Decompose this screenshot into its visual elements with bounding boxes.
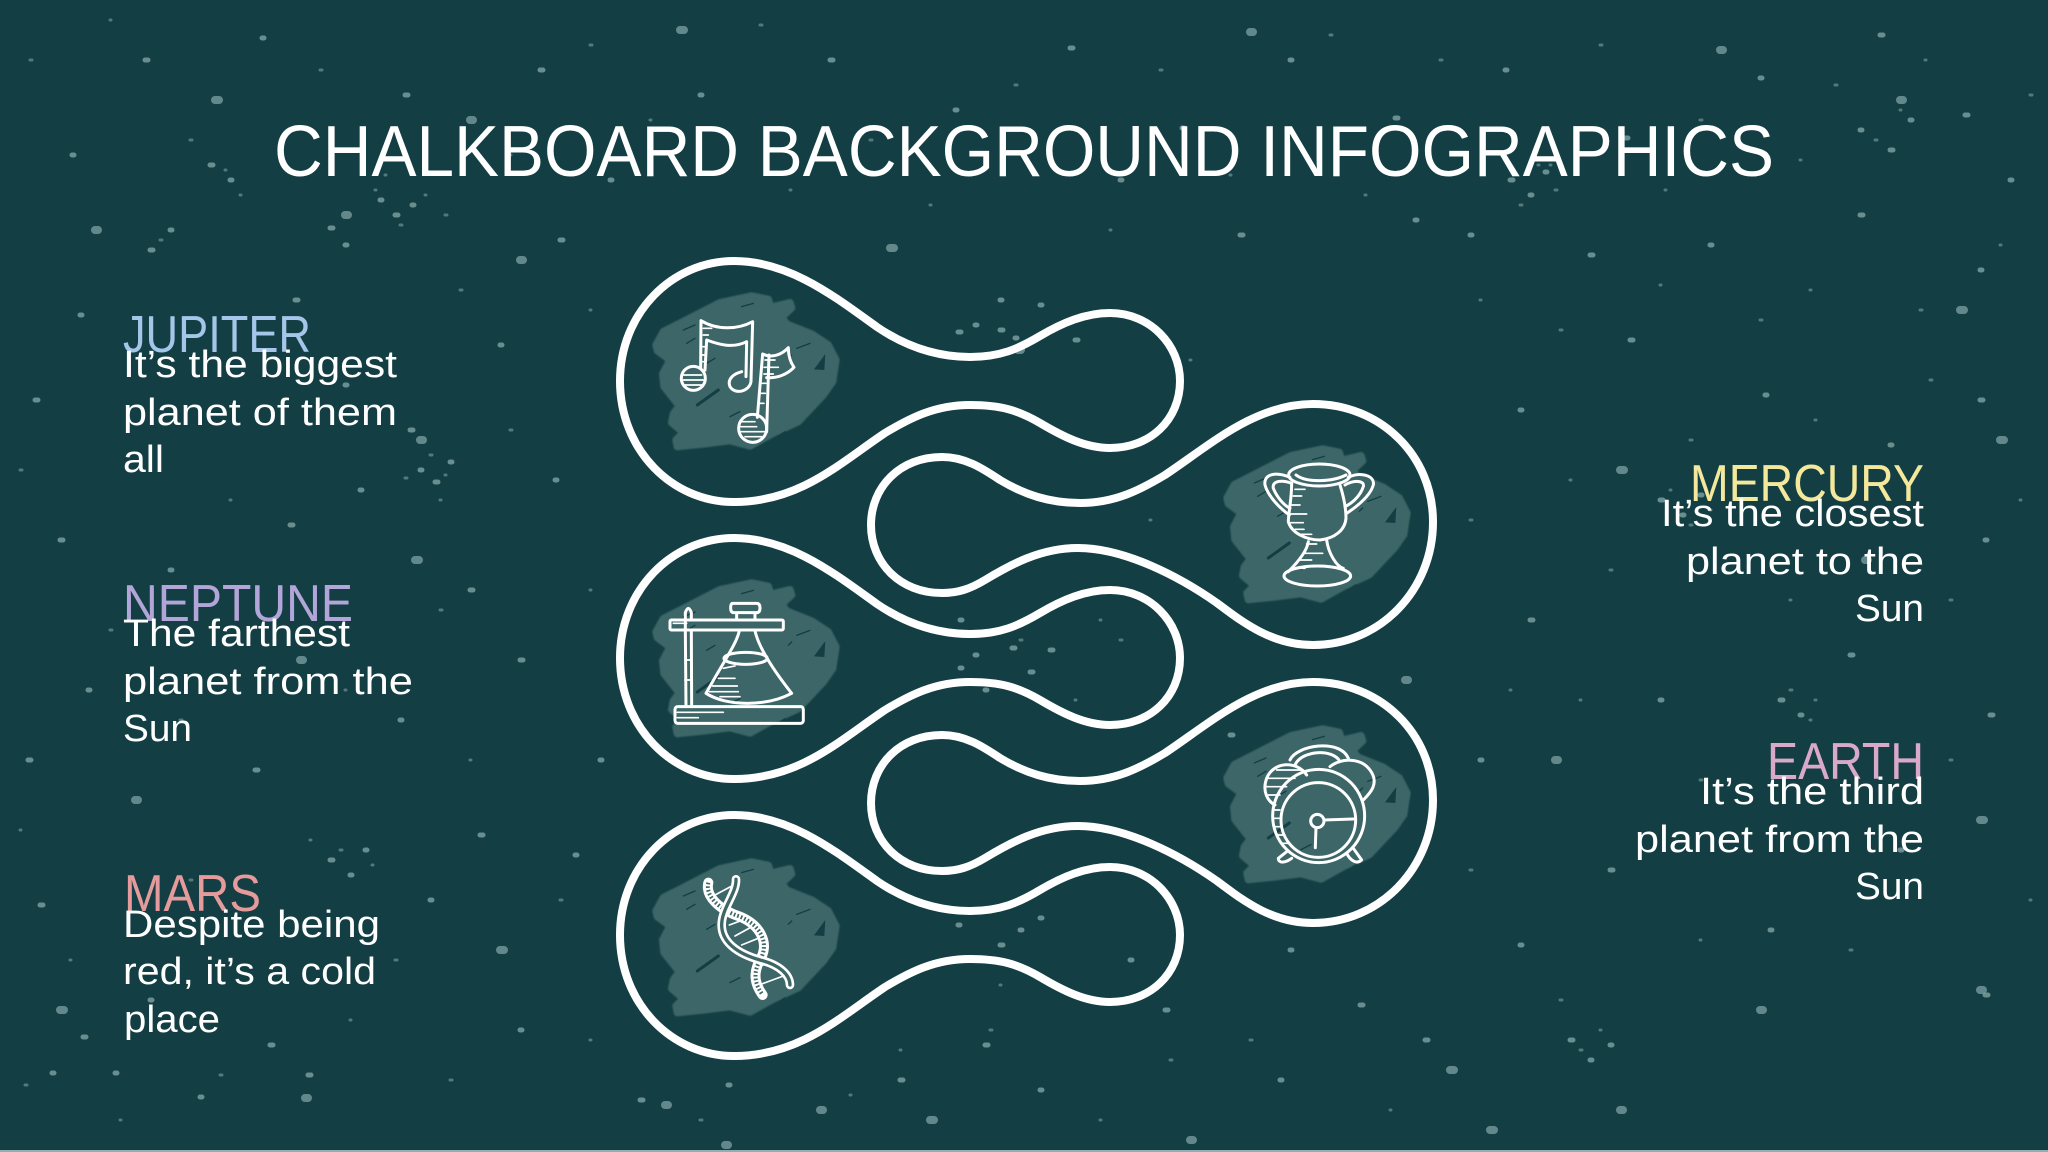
icon: dna helix bbox=[708, 879, 790, 995]
label: mercury bbox=[1661, 455, 1924, 630]
icon: music notes bbox=[681, 321, 794, 442]
label: jupiter: It’s the biggest bbox=[123, 344, 397, 386]
chalk scribble: flask bbox=[656, 583, 836, 734]
label: jupiter: planet of them bbox=[123, 392, 397, 434]
loop: neptune flask bbox=[620, 538, 1180, 779]
label: jupiter bbox=[123, 306, 397, 481]
label: mars bbox=[123, 865, 380, 1041]
chalk scribble: music bbox=[656, 296, 836, 447]
label: neptune: Sun bbox=[123, 708, 192, 750]
label: mercury: MERCURY bbox=[1690, 455, 1924, 513]
label: mars: Despite being bbox=[123, 904, 380, 946]
label: earth: planet from the bbox=[1635, 819, 1924, 861]
loop: mars dna bbox=[620, 815, 1180, 1056]
label: neptune: planet from the bbox=[123, 661, 413, 703]
label: mercury: planet to the bbox=[1686, 541, 1924, 583]
icon: alarm clock bbox=[1265, 746, 1374, 863]
label: mars: MARS bbox=[124, 865, 261, 923]
label: earth: EARTH bbox=[1767, 733, 1924, 791]
icon: trophy bbox=[1265, 464, 1373, 586]
loop: earth clock bbox=[871, 682, 1433, 923]
label: earth: Sun bbox=[1855, 866, 1924, 908]
bottom edge line bbox=[0, 1150, 2048, 1152]
title: CHALKBOARD BACKGROUND INFOGRAPHICS bbox=[274, 112, 1774, 192]
label: jupiter: all bbox=[123, 439, 164, 481]
label: mercury: It’s the closest bbox=[1661, 493, 1924, 535]
label: mercury: Sun bbox=[1855, 588, 1924, 630]
label: mars: place bbox=[124, 999, 220, 1041]
loop: mercury trophy bbox=[871, 404, 1433, 645]
chalk scribble: trophy bbox=[1227, 449, 1407, 600]
label: jupiter: JUPITER bbox=[123, 306, 311, 364]
chalk scribble: clock bbox=[1227, 729, 1407, 880]
icon: flask on stand bbox=[670, 603, 803, 723]
label: neptune: The farthest bbox=[123, 613, 350, 655]
label: earth bbox=[1635, 733, 1924, 908]
label: neptune: NEPTUNE bbox=[123, 575, 353, 633]
loop: jupiter music bbox=[620, 261, 1180, 502]
chalk scribble: dna bbox=[656, 862, 836, 1013]
label: mars: red, it’s a cold bbox=[123, 951, 376, 993]
label: earth: It’s the third bbox=[1700, 771, 1924, 813]
label: neptune bbox=[123, 575, 413, 750]
